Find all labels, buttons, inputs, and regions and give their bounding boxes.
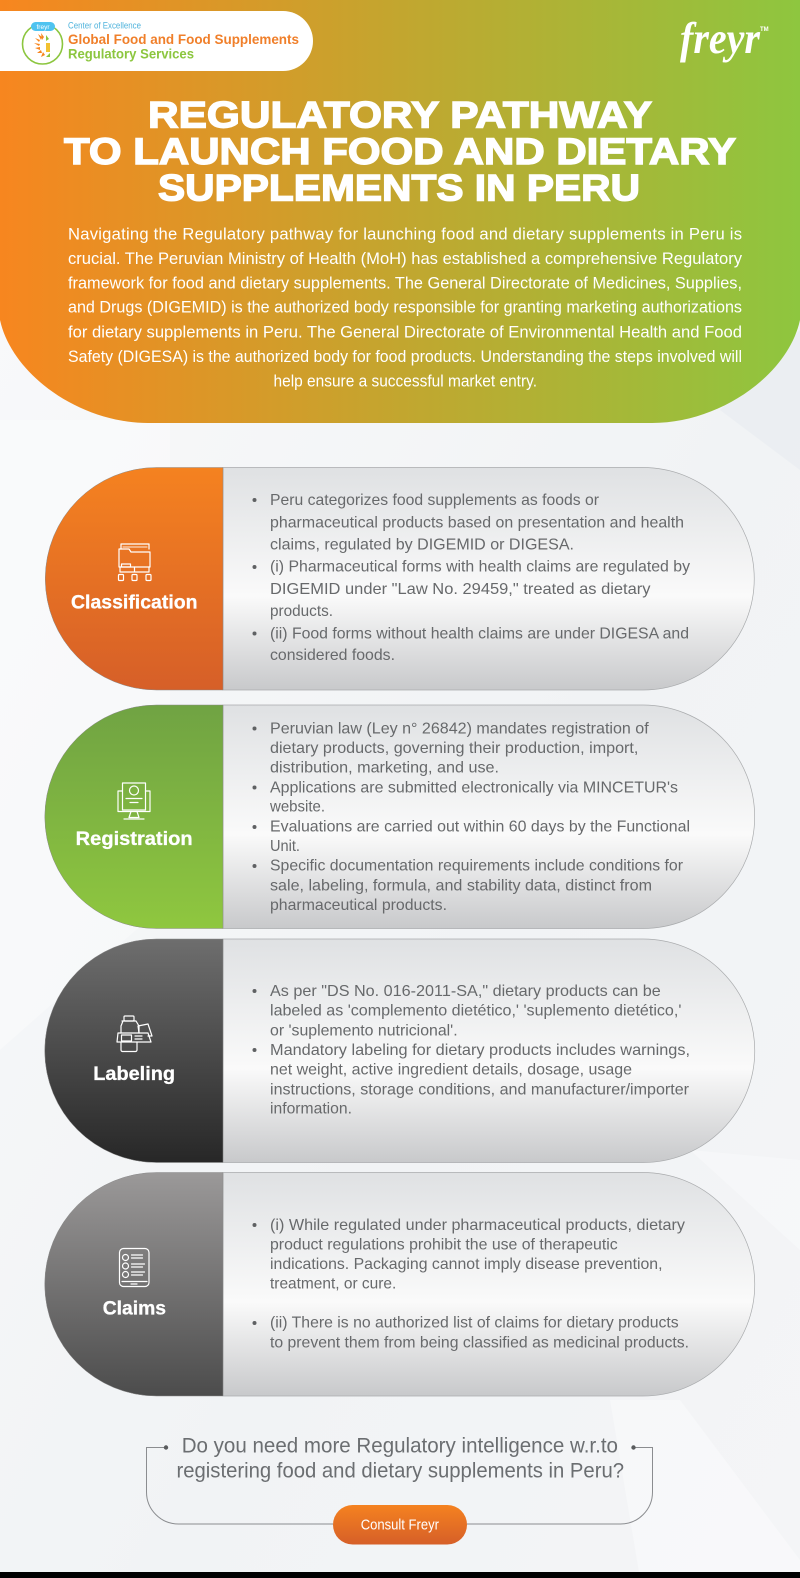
icon: checklist tablet bbox=[120, 1248, 149, 1286]
registration text: Applications are submitted electronically via MINCETUR's bbox=[270, 779, 678, 796]
labeling text: Mandatory labeling for dietary products includes warnings, bbox=[270, 1042, 690, 1059]
icon: monitor with document bbox=[118, 783, 150, 819]
badge text: Center of Excellence bbox=[68, 20, 141, 32]
intro paragraph: help ensure a successful market entry. bbox=[274, 372, 537, 391]
intro paragraph: crucial. The Peruvian Ministry of Health (MoH) has established a comprehensive Regulatory bbox=[68, 249, 743, 268]
cta question bbox=[176, 1434, 624, 1483]
registration text: Evaluations are carried out within 60 days by the Functional bbox=[270, 819, 690, 836]
label: claims: Claims bbox=[103, 1297, 166, 1319]
intro paragraph: and Drugs (DIGEMID) is the authorized body responsible for granting marketing authorizations bbox=[68, 298, 742, 317]
labeling text: As per "DS No. 016-2011-SA," dietary products can be bbox=[270, 983, 661, 1000]
claims text: indications. Packaging cannot imply disease prevention, bbox=[270, 1256, 662, 1273]
claims text: product regulations prohibit the use of therapeutic bbox=[270, 1236, 618, 1253]
freyr logo: freyr bbox=[680, 14, 761, 63]
classification text bbox=[252, 492, 690, 664]
panel: registration bbox=[45, 705, 755, 928]
connector frame bbox=[146, 1448, 652, 1524]
classification text: DIGEMID under "Law No. 29459," treated as dietary bbox=[270, 581, 651, 598]
title: SUPPLEMENTS IN PERU bbox=[158, 166, 640, 208]
icon: center of excellence logo: freyr bbox=[36, 24, 50, 31]
panel: labeling bbox=[45, 939, 755, 1162]
classification text: considered foods. bbox=[270, 647, 395, 664]
registration text: dietary products, governing their production, import, bbox=[270, 740, 638, 757]
title: REGULATORY PATHWAY bbox=[148, 94, 652, 136]
classification text: (ii) Food forms without health claims are under DIGESA and bbox=[270, 625, 689, 642]
registration text: pharmaceutical products. bbox=[270, 897, 447, 914]
registration text: Unit. bbox=[270, 838, 300, 855]
registration text: website. bbox=[269, 799, 325, 816]
header banner bbox=[0, 0, 800, 423]
claims text: treatment, or cure. bbox=[270, 1275, 396, 1292]
claims text: to prevent them from being classified as medicinal products. bbox=[270, 1334, 689, 1351]
badge text bbox=[68, 20, 299, 62]
icon: center of excellence logo bbox=[22, 22, 62, 64]
cta question: registering food and dietary supplements in Peru? bbox=[176, 1459, 624, 1483]
classification text: Peru categorizes food supplements as foods or bbox=[270, 492, 599, 509]
registration text: distribution, marketing, and use. bbox=[270, 760, 499, 777]
labeling text: labeled as 'complemento dietético,' 'suplemento dietético,' bbox=[270, 1003, 681, 1020]
label: registration: Registration bbox=[76, 828, 193, 850]
labeling text: net weight, active ingredient details, dosage, usage bbox=[270, 1062, 632, 1078]
intro paragraph: Navigating the Regulatory pathway for launching food and dietary supplements in Peru is bbox=[68, 224, 742, 243]
intro paragraph: framework for food and dietary supplements. The General Directorate of Medicines, Supplies, bbox=[68, 273, 742, 292]
icon: bottle with label bbox=[117, 1016, 152, 1052]
badge text: Global Food and Food Supplements bbox=[68, 31, 299, 47]
button: consult freyr bbox=[333, 1505, 467, 1544]
label: labeling: Labeling bbox=[93, 1063, 175, 1085]
classification text: claims, regulated by DIGEMID or DIGESA. bbox=[270, 536, 574, 554]
freyr logo: TM bbox=[760, 27, 769, 33]
intro paragraph bbox=[68, 224, 743, 391]
title: TO LAUNCH FOOD AND DIETARY bbox=[64, 130, 736, 172]
claims text bbox=[252, 1217, 689, 1351]
panel: classification bbox=[45, 468, 754, 690]
badge text: Regulatory Services bbox=[68, 46, 194, 62]
labeling text: information. bbox=[270, 1100, 352, 1118]
icon: folder hierarchy bbox=[118, 544, 151, 580]
registration text: Specific documentation requirements include conditions for bbox=[270, 858, 683, 875]
button: consult freyr: Consult Freyr bbox=[361, 1517, 439, 1533]
labeling text bbox=[252, 983, 690, 1118]
registration text bbox=[252, 720, 690, 914]
intro paragraph: for dietary supplements in Peru. The General Directorate of Environmental Health and Food bbox=[68, 322, 742, 341]
classification text: pharmaceutical products based on presentation and health bbox=[270, 514, 684, 532]
intro paragraph: Safety (DIGESA) is the authorized body for food products. Understanding the steps involved will bbox=[68, 347, 742, 366]
claims text: (ii) There is no authorized list of claims for dietary products bbox=[270, 1315, 679, 1332]
panel: claims bbox=[45, 1172, 755, 1396]
registration text: sale, labeling, formula, and stability data, distinct from bbox=[270, 877, 652, 894]
labeling text: instructions, storage conditions, and manufacturer/importer bbox=[270, 1081, 689, 1098]
classification text: (i) Pharmaceutical forms with health claims are regulated by bbox=[270, 559, 690, 576]
registration text: Peruvian law (Ley n° 26842) mandates registration of bbox=[270, 720, 649, 737]
claims text: (i) While regulated under pharmaceutical products, dietary bbox=[270, 1217, 685, 1234]
call to action bbox=[146, 1434, 652, 1544]
classification text: products. bbox=[270, 603, 333, 620]
cta question: Do you need more Regulatory intelligence w.r.to bbox=[182, 1434, 618, 1458]
title bbox=[64, 94, 736, 208]
label: classification: Classification bbox=[71, 591, 198, 613]
labeling text: or 'suplemento nutricional'. bbox=[270, 1022, 458, 1039]
center of excellence badge bbox=[0, 11, 313, 71]
